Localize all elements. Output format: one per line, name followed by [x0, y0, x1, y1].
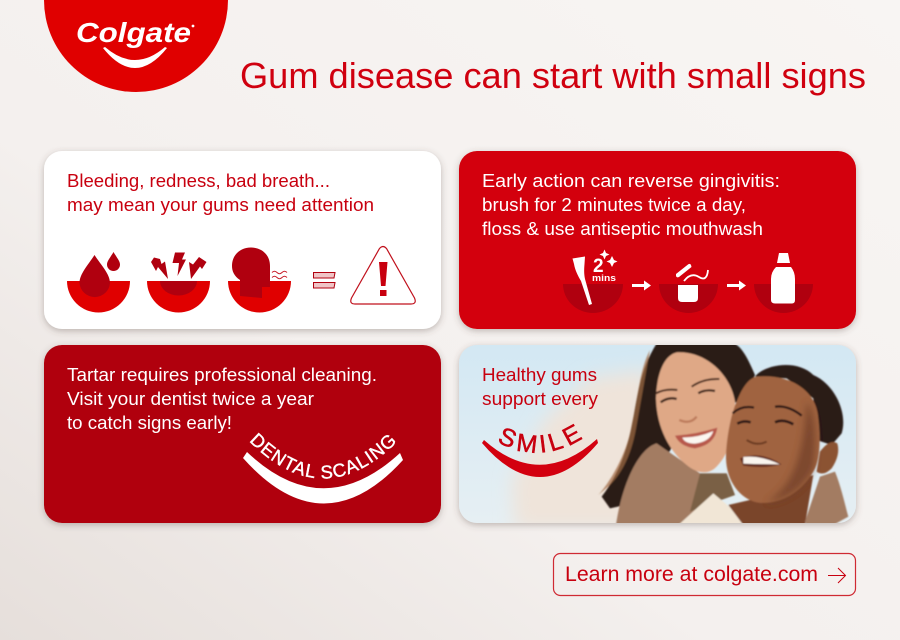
man hair — [755, 365, 843, 445]
early action text — [482, 171, 780, 239]
man features — [733, 406, 802, 416]
arrow — [727, 280, 746, 290]
tartar text: Tartar requires professional cleaning. — [67, 365, 377, 385]
man shirt and neck — [678, 493, 743, 525]
panel: healthy gums photo — [456, 342, 860, 528]
woman sweater — [616, 443, 735, 525]
icon: toothbrush two minutes: 2 — [593, 256, 604, 277]
icon: bleeding — [67, 252, 130, 312]
icon: floss — [659, 264, 718, 313]
smile wordmark: SMILE — [499, 424, 582, 454]
tartar text — [67, 365, 377, 433]
icon: bad breath — [228, 248, 291, 312]
early action text: floss & use antiseptic mouthwash — [482, 219, 763, 239]
panel: tartar — [40, 344, 444, 528]
dental scaling smile: DENTAL SCALING — [250, 432, 396, 479]
woman face — [656, 352, 735, 472]
man arm — [805, 472, 848, 525]
logo: Colgate badge: Colgate — [76, 17, 191, 48]
healthy gums text — [482, 365, 598, 409]
icon: warning triangle — [351, 246, 415, 304]
photo: smiling couple — [459, 343, 856, 530]
panel: warning signs — [44, 151, 441, 329]
early action text: brush for 2 minutes twice a day, — [482, 195, 746, 215]
icon: mouthwash — [754, 253, 813, 313]
logo: Colgate badge — [44, 0, 228, 92]
icon: equals — [314, 272, 335, 288]
man ear — [817, 442, 838, 474]
button: learn more: Learn more at colgate.com — [565, 563, 818, 586]
man head — [726, 376, 820, 503]
button: learn more — [554, 554, 856, 596]
icon: toothbrush two minutes: mins — [592, 273, 616, 284]
dental scaling smile — [243, 432, 403, 504]
woman features — [656, 379, 719, 393]
early action text: Early action can reverse gingivitis: — [482, 171, 780, 191]
icon: toothbrush two minutes — [563, 250, 623, 313]
title: Gum disease can start with small signs — [240, 55, 866, 96]
tartar text: to catch signs early! — [67, 413, 232, 433]
icon: redness and pain — [147, 252, 210, 312]
smile wordmark — [482, 424, 598, 477]
warning signs text: Bleeding, redness, bad breath... — [67, 171, 330, 191]
healthy gums text: support every — [482, 389, 598, 409]
panel: early action — [459, 151, 856, 329]
warning signs text — [67, 171, 374, 215]
arrow — [632, 280, 651, 290]
icon: arrow — [828, 568, 846, 583]
warning signs text: may mean your gums need attention — [67, 195, 374, 215]
woman hair — [602, 343, 755, 508]
tartar text: Visit your dentist twice a year — [67, 389, 314, 409]
healthy gums text: Healthy gums — [482, 365, 597, 385]
